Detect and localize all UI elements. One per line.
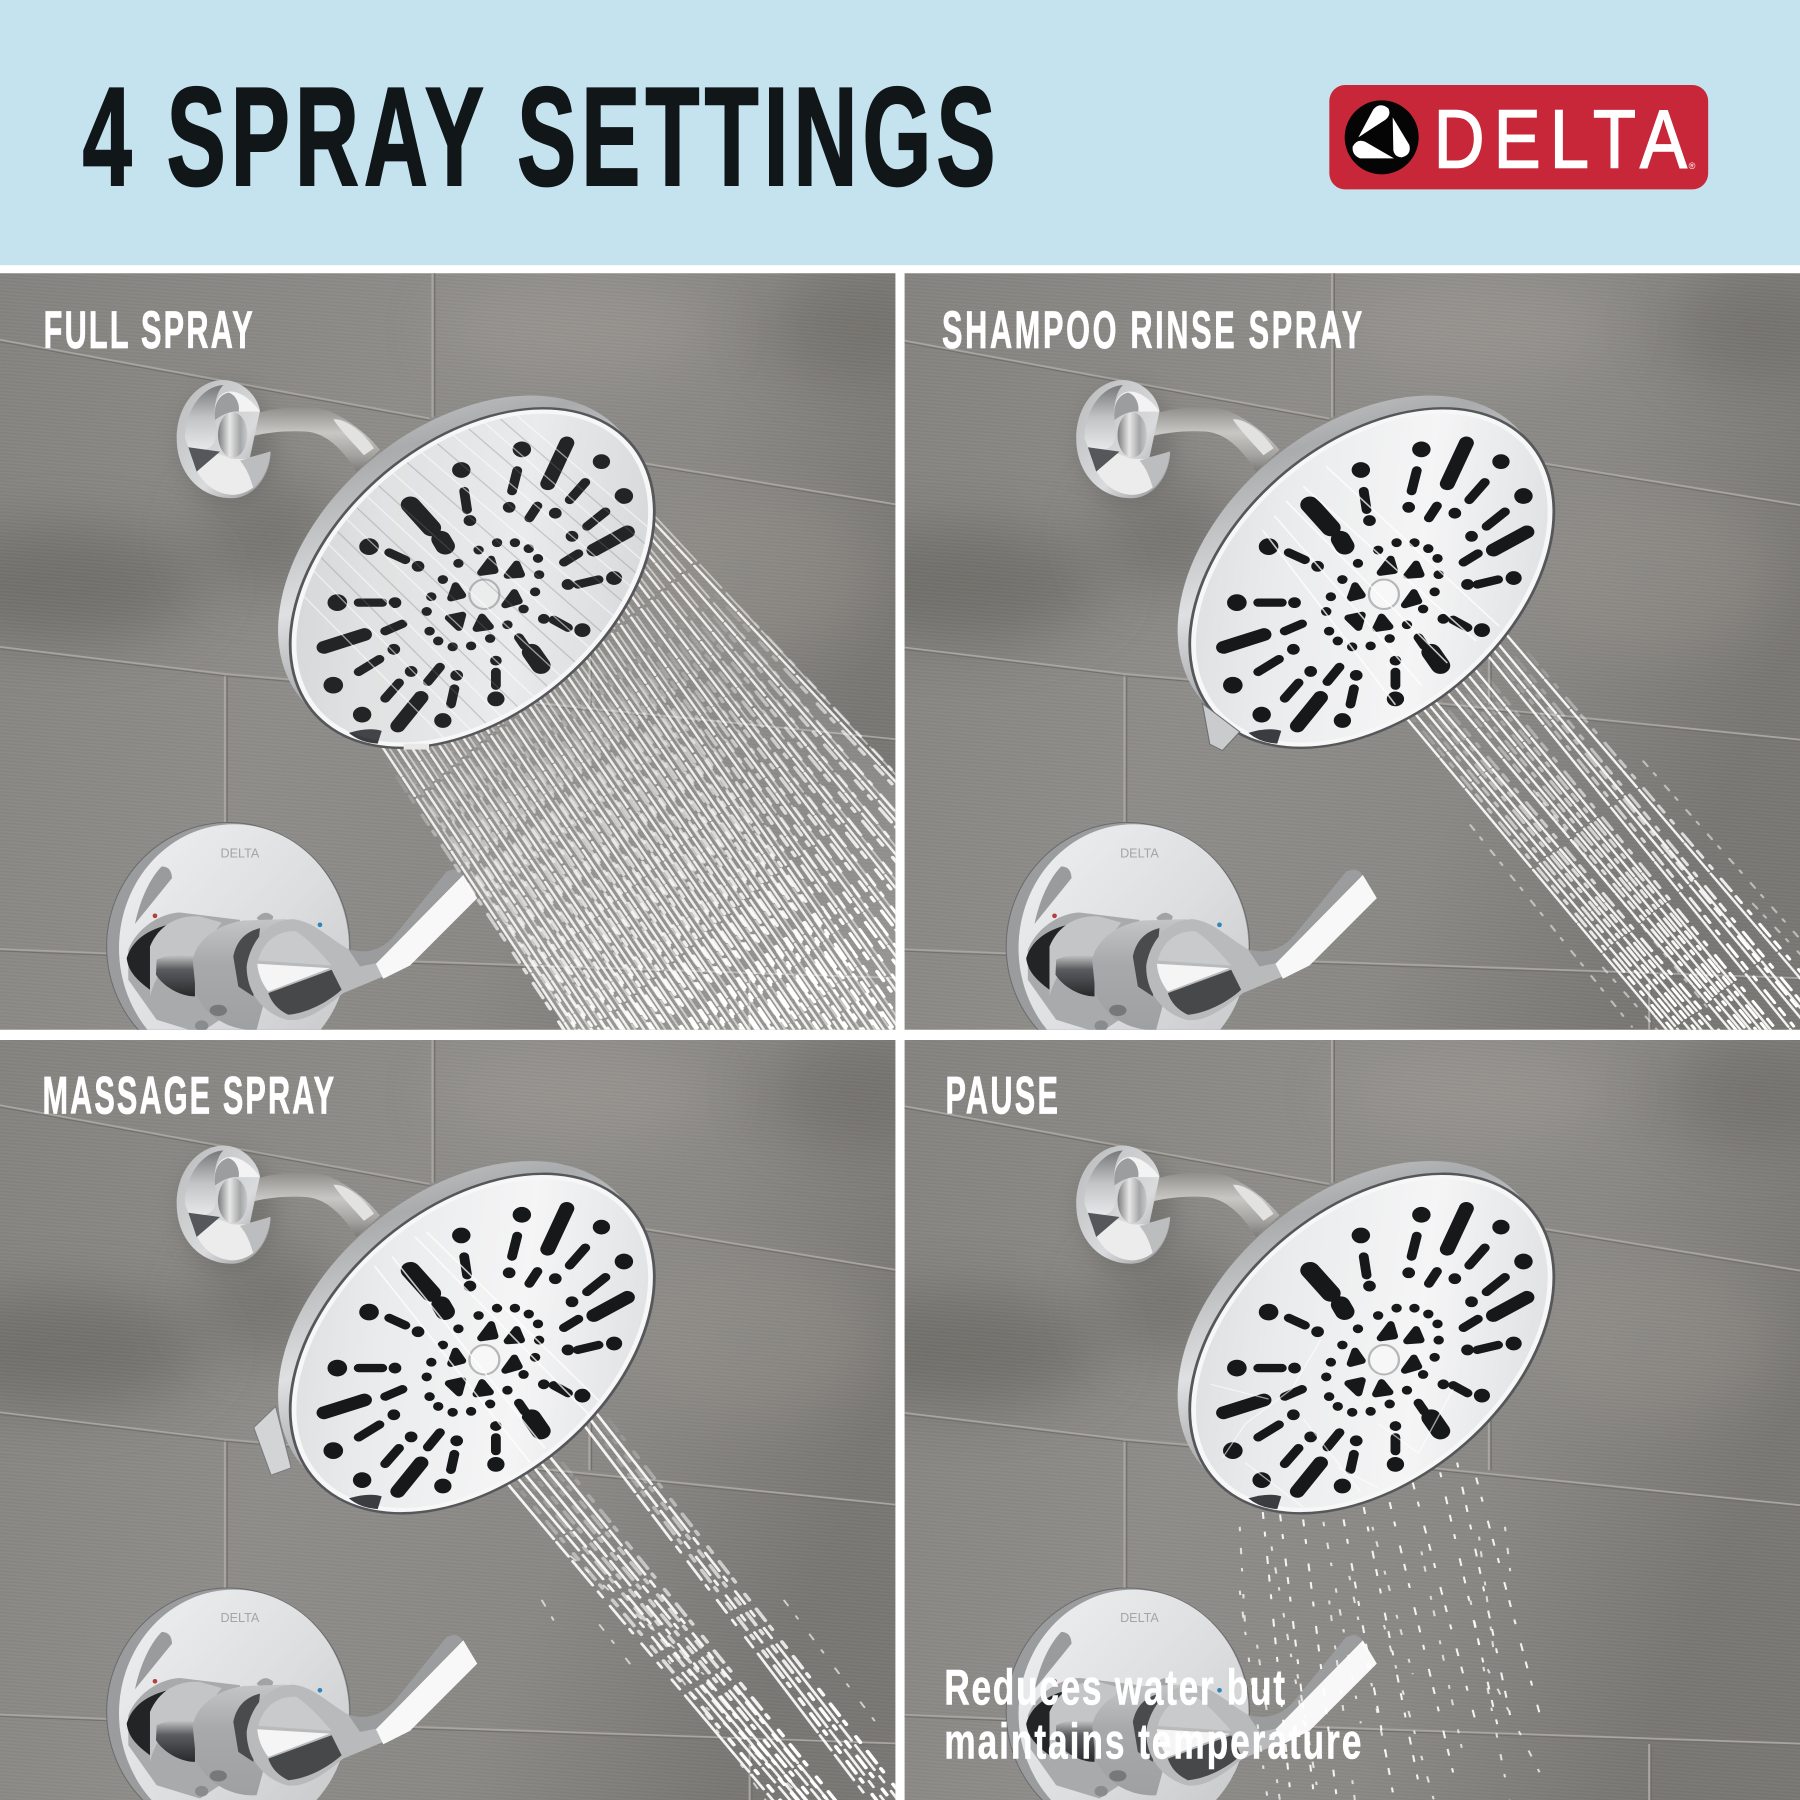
tab below head xyxy=(404,744,429,750)
pause description: maintains temperature xyxy=(944,1715,1361,1770)
water: wide full spray xyxy=(377,515,912,1040)
registered mark: ® xyxy=(1689,161,1696,171)
water film on head face xyxy=(1211,1340,1453,1507)
panel: full spray xyxy=(0,273,896,1030)
panel: pause xyxy=(904,1040,1800,1800)
plate brand mark: DELTA xyxy=(221,1611,260,1625)
plate brand mark: DELTA xyxy=(1120,1611,1159,1625)
label: SHAMPOO RINSE SPRAY xyxy=(942,301,1362,360)
icon: spray selector tab xyxy=(1202,703,1240,751)
water film on head face xyxy=(375,1232,600,1463)
water film on head face xyxy=(296,414,648,742)
pause description: Reduces water but xyxy=(944,1661,1285,1716)
water: massage jets xyxy=(490,1404,905,1800)
water film on head face xyxy=(1263,467,1499,705)
label: MASSAGE SPRAY xyxy=(42,1067,334,1126)
header band xyxy=(0,0,1800,265)
logo: Delta xyxy=(1329,85,1708,189)
water: pause droplets xyxy=(1240,1443,1540,1800)
label: FULL SPRAY xyxy=(44,301,253,360)
plate brand mark: DELTA xyxy=(1120,847,1159,861)
plate brand mark: DELTA xyxy=(221,847,260,861)
panel: shampoo rinse spray xyxy=(904,273,1800,1030)
title: 4 SPRAY SETTINGS xyxy=(83,58,995,215)
panel: massage spray xyxy=(0,1040,896,1800)
pause description xyxy=(944,1661,1361,1770)
icon: spray selector tab xyxy=(254,1406,291,1475)
water: concentrated shampoo rinse stream xyxy=(1395,625,1800,1040)
label: PAUSE xyxy=(945,1067,1058,1126)
icon: Delta triangle mark xyxy=(1345,100,1419,174)
wordmark: DELTA xyxy=(1434,94,1696,186)
